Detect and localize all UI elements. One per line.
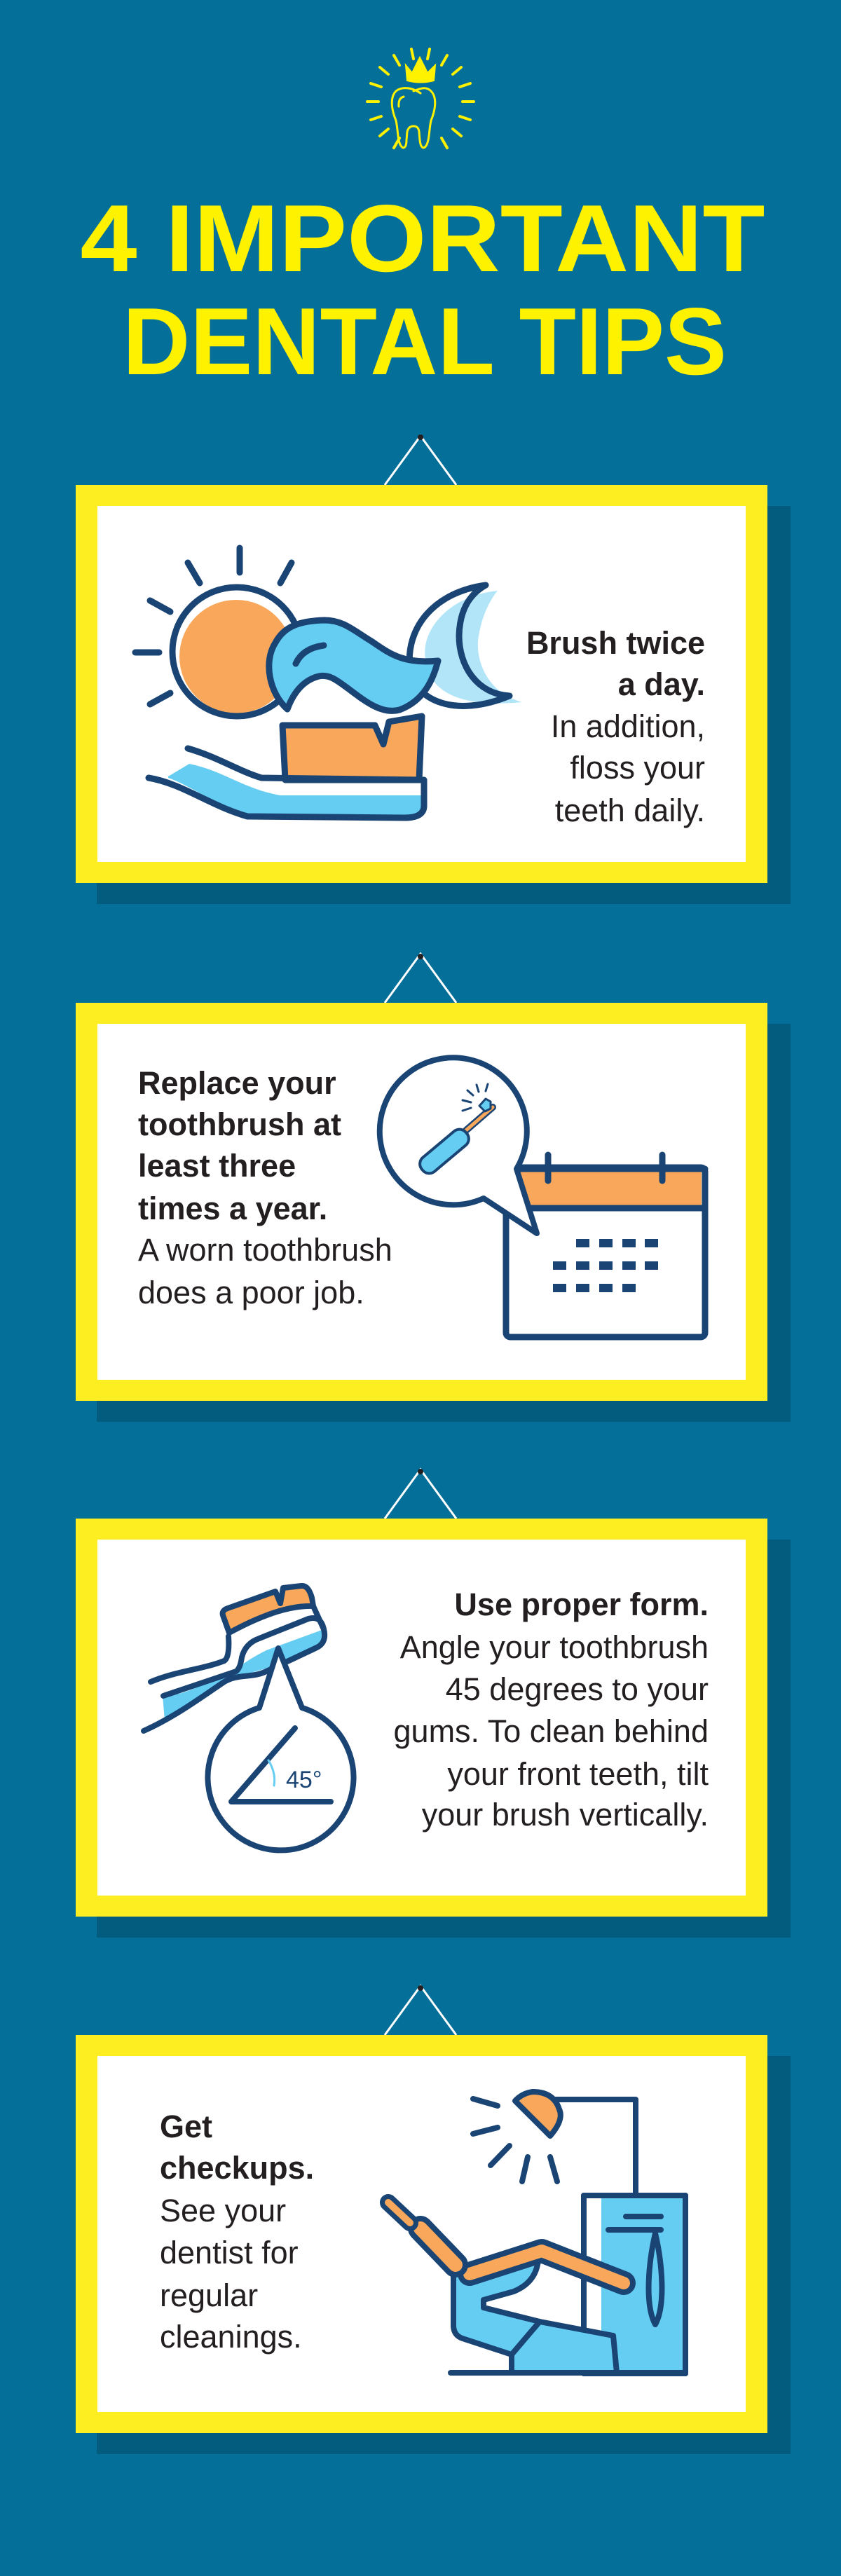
text: proper form: Use proper form. [454, 1587, 709, 1622]
icon: angled toothbrush [144, 1586, 324, 1731]
panel: proper form [76, 1469, 791, 1938]
icon: 45 degree bubble: 45° [286, 1767, 322, 1793]
icon: 45 degree bubble [207, 1648, 354, 1850]
panel: brush twice [76, 434, 791, 904]
text: replace: A worn toothbrush [138, 1232, 392, 1268]
text: proper form [394, 1587, 709, 1832]
text: checkups: checkups. [160, 2150, 314, 2186]
icon: dental chair [388, 2092, 685, 2373]
text: brush twice: a day. [618, 666, 705, 702]
title [80, 185, 765, 395]
text: brush twice [526, 625, 705, 828]
icon: tooth with crown [367, 49, 474, 148]
text: replace: Replace your [138, 1065, 336, 1101]
icon: calendar [506, 1155, 705, 1337]
icon: speech bubble with toothbrush [380, 1057, 537, 1233]
text: checkups: regular [160, 2277, 258, 2313]
text: proper form: gums. To clean behind [394, 1713, 709, 1749]
text: proper form: your front teeth, tilt [447, 1756, 709, 1792]
text: proper form: 45 degrees to your [446, 1671, 709, 1707]
text: replace: least three [138, 1148, 296, 1184]
hanger [385, 1469, 456, 1519]
text: brush twice: floss your [570, 750, 705, 786]
title: 4 IMPORTANT [80, 185, 765, 292]
text: replace: times a year. [138, 1191, 327, 1226]
panel: replace toothbrush [76, 954, 791, 1422]
hanger [385, 434, 456, 485]
text: brush twice: In addition, [551, 708, 705, 744]
text: checkups [160, 2109, 314, 2355]
text: replace: toothbrush at [138, 1107, 341, 1142]
text: checkups: cleanings. [160, 2319, 302, 2355]
text: checkups: See your [160, 2193, 286, 2228]
text: checkups: Get [160, 2109, 212, 2144]
panel: checkups [76, 1985, 791, 2454]
text: proper form: Angle your toothbrush [400, 1629, 709, 1665]
hanger [385, 954, 456, 1003]
text: proper form: your brush vertically. [422, 1797, 709, 1832]
text: checkups: dentist for [160, 2235, 299, 2270]
text: brush twice: teeth daily. [555, 793, 705, 828]
title: DENTAL TIPS [123, 288, 727, 395]
text: brush twice: Brush twice [526, 625, 705, 661]
text: replace [138, 1065, 392, 1310]
icon: sun, toothpaste, moon, toothbrush [135, 548, 522, 818]
text: replace: does a poor job. [138, 1275, 364, 1310]
hanger [385, 1985, 456, 2035]
